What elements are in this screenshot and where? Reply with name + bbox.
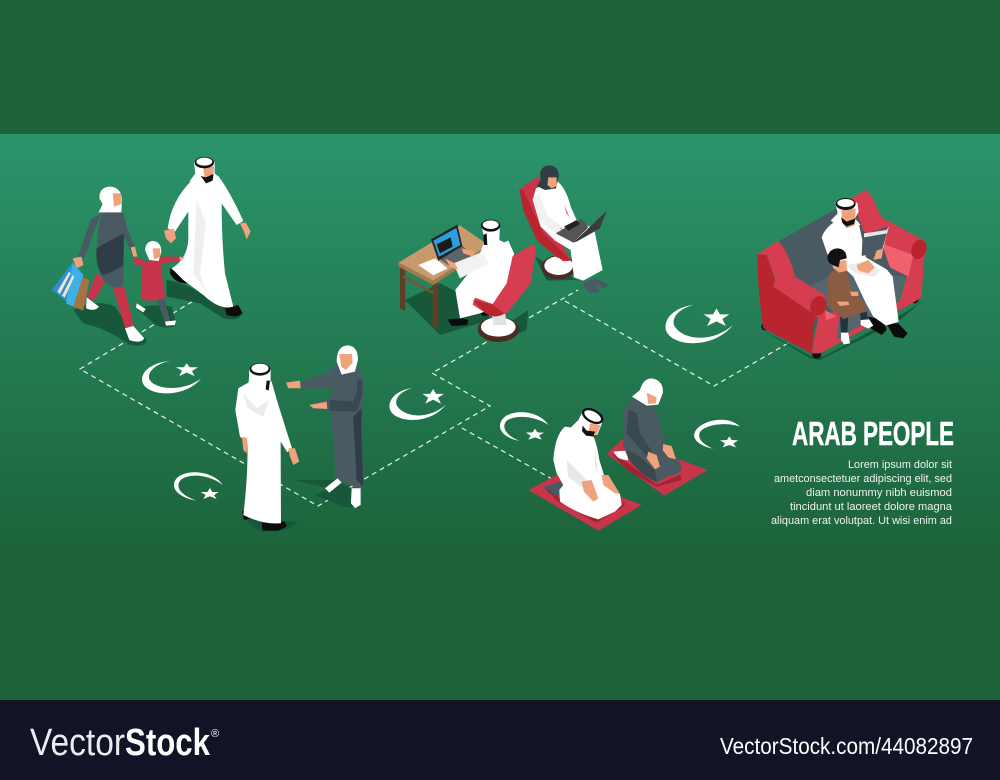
family walking group — [52, 157, 251, 346]
shopping bags — [52, 262, 89, 311]
icon: crescent and star 2 — [174, 472, 223, 501]
main green panel — [0, 134, 1000, 700]
greeting ground shadows — [245, 480, 360, 532]
footer brand logo: Vector — [30, 722, 125, 764]
praying man in white thobe — [543, 406, 625, 523]
icon: crescent and star 5 — [694, 420, 740, 449]
body text block: Lorem ipsum dolor sit — [848, 459, 952, 471]
seated woman with laptop — [533, 165, 609, 293]
icon: crescent and star 4 — [500, 412, 548, 441]
wooden desk — [398, 225, 488, 328]
sofa shadow — [760, 302, 922, 360]
body text block — [771, 459, 953, 527]
red swivel chair for woman — [519, 176, 576, 279]
body text block: ametconsectetuer adipiscing elit, sed — [774, 473, 952, 485]
praying woman in dark dress — [612, 378, 682, 487]
body text block: tincidunt ut laoreet dolore magna — [790, 501, 953, 513]
body text block: diam nonummy nibh euismod — [806, 487, 952, 499]
body text block: aliquam erat volutpat. Ut wisi enim ad — [771, 515, 952, 527]
red swivel chair for man — [473, 245, 536, 342]
top band — [0, 0, 1000, 134]
prayer rug 2 — [607, 438, 708, 496]
dashed isometric path — [80, 290, 790, 506]
family ground shadows — [73, 280, 242, 346]
man in white seen from behind — [235, 363, 299, 531]
footer brand logo: Stock — [125, 722, 211, 764]
woman in dark dress gesturing — [286, 345, 364, 508]
sofa with father and son — [757, 190, 929, 360]
laptop on desk — [431, 225, 474, 267]
footer brand logo: ® — [211, 728, 219, 740]
child in red dress — [133, 241, 185, 326]
icon: crescent and star 6 — [666, 305, 733, 343]
footer image id: VectorStock.com/44082897 — [720, 733, 973, 759]
desk worker and chair woman — [398, 165, 609, 342]
prayer rug 1 — [528, 473, 642, 531]
praying couple on rugs — [528, 378, 708, 531]
greeting couple — [235, 345, 364, 532]
son in brown robe — [827, 248, 873, 344]
woman with shopping bags — [52, 187, 144, 342]
father in white with book — [822, 198, 908, 338]
red sofa — [757, 190, 929, 359]
footer brand logo — [30, 722, 219, 764]
seated man typing — [445, 220, 514, 326]
footer bar — [0, 700, 1000, 780]
icon: crescent and star 3 — [389, 388, 446, 420]
desk shadow — [405, 257, 583, 342]
icon: crescent and star 1 — [142, 361, 201, 393]
man in white thobe walking — [164, 157, 251, 316]
